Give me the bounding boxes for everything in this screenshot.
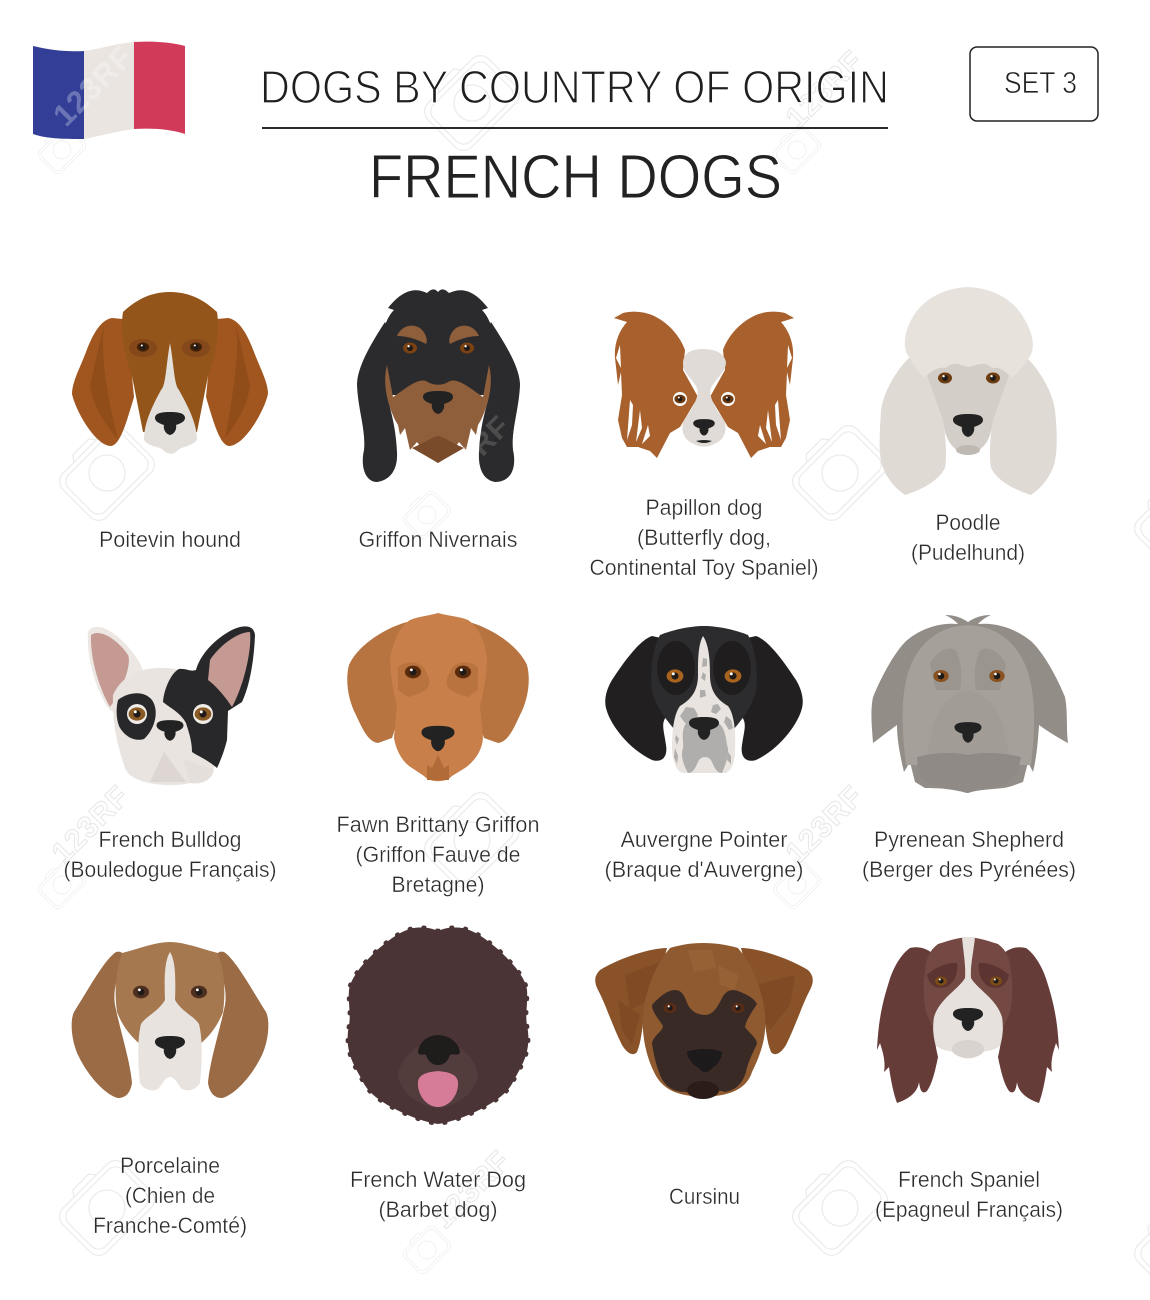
topknot [905,287,1033,378]
label: French Spaniel: French Spaniel [898,1167,1040,1192]
label: Poitevin hound: Poitevin hound [99,527,241,552]
head [122,292,218,432]
white blaze and muzzle [672,636,735,773]
flag of France [33,39,185,139]
badge: set 3: SET 3 [1004,65,1077,100]
label: Porcelaine: (Chien de [125,1183,215,1208]
label: Poodle: Poodle [936,510,1000,535]
label: French Spaniel [875,1167,1063,1222]
watermark layer: 123RF [427,1144,517,1235]
dog: Poodle [880,287,1057,495]
heading: French dogs: FRENCH DOGS [369,143,782,212]
label: Auvergne Pointer [604,827,804,882]
label: Porcelaine: Porcelaine [120,1153,220,1178]
dog: Griffon Nivernais [357,289,520,482]
dark mask [652,990,757,1093]
dog: Papillon [614,312,794,458]
muzzle grey patch [682,722,728,773]
head [390,613,487,781]
flag of France: 123RF [46,39,140,133]
head [903,625,1034,765]
label: French Water Dog [350,1167,526,1222]
label: Fawn Brittany Griffon: Bretagne) [392,872,484,897]
label: French Spaniel: (Epagneul Français) [875,1197,1063,1222]
watermark layer: 123RF [780,779,870,870]
dog: Cursinu [595,943,813,1099]
badge: set 3 [970,47,1098,121]
dog: Pyrenean Shepherd [871,615,1068,793]
label: Fawn Brittany Griffon [336,812,540,897]
label: Papillon dog [590,495,818,580]
watermark layer: 123RF [46,779,136,870]
muzzle [925,350,1011,455]
label: Fawn Brittany Griffon: Fawn Brittany Griffon [336,812,540,837]
label: Poodle [911,510,1025,565]
label: Auvergne Pointer: (Braque d'Auvergne) [604,857,804,882]
eye shadows [398,662,478,697]
head [113,668,228,785]
beard [385,365,491,463]
spots [674,658,733,764]
dog: French Water Dog [348,927,528,1124]
head [651,626,757,730]
white blaze and muzzle [144,343,197,454]
fur slits [616,345,792,444]
dog: Porcelaine [72,942,268,1098]
title underline [262,127,888,129]
dog: French Spaniel [877,937,1059,1103]
label: French Water Dog: (Barbet dog) [378,1197,498,1222]
label: Griffon Nivernais: Griffon Nivernais [358,527,518,552]
dog: French Bulldog [88,626,255,785]
label: Fawn Brittany Griffon: (Griffon Fauve de [356,842,520,867]
label: Porcelaine: Franche-Comté) [93,1213,247,1238]
black patch and right ear [163,626,255,768]
label: Pyrenean Shepherd: (Berger des Pyrénées) [862,857,1076,882]
muzzle [398,1040,478,1108]
eye patches [927,963,1009,988]
white face [682,349,726,447]
watermark over Griffon ear: 123RF [427,409,517,500]
label: Papillon dog: Continental Toy Spaniel) [590,555,818,580]
label: Porcelaine [93,1153,247,1238]
label: Papillon dog: Papillon dog [646,495,762,520]
label: Pyrenean Shepherd: Pyrenean Shepherd [874,827,1064,852]
head [116,942,224,1044]
tongue [418,1071,458,1107]
label: Poodle: (Pudelhund) [911,540,1025,565]
eyebrows [397,326,427,344]
head [924,937,1012,1040]
dog: Auvergne Pointer [605,626,803,773]
watermark layer: 123RF [780,44,870,135]
dog: Poitevin hound [72,292,268,454]
title: dogs by country of origin: DOGS BY COUNTRY OF ORIGIN [260,61,889,113]
label: Auvergne Pointer: Auvergne Pointer [620,827,788,852]
head [643,943,765,1098]
label: French Bulldog [64,827,276,882]
label: French Water Dog: French Water Dog [350,1167,526,1192]
label: Papillon dog: (Butterfly dog, [637,525,771,550]
label: French Bulldog: (Bouledogue Français) [64,857,276,882]
label: French Bulldog: French Bulldog [98,827,242,852]
label: Pyrenean Shepherd [862,827,1076,882]
beard [917,753,1021,793]
white blaze and muzzle [933,937,1003,1058]
left eye patch [117,693,156,740]
dog: Fawn Brittany Griffon [347,613,529,781]
white blaze and muzzle [138,952,202,1090]
label: Cursinu: Cursinu [669,1184,740,1209]
